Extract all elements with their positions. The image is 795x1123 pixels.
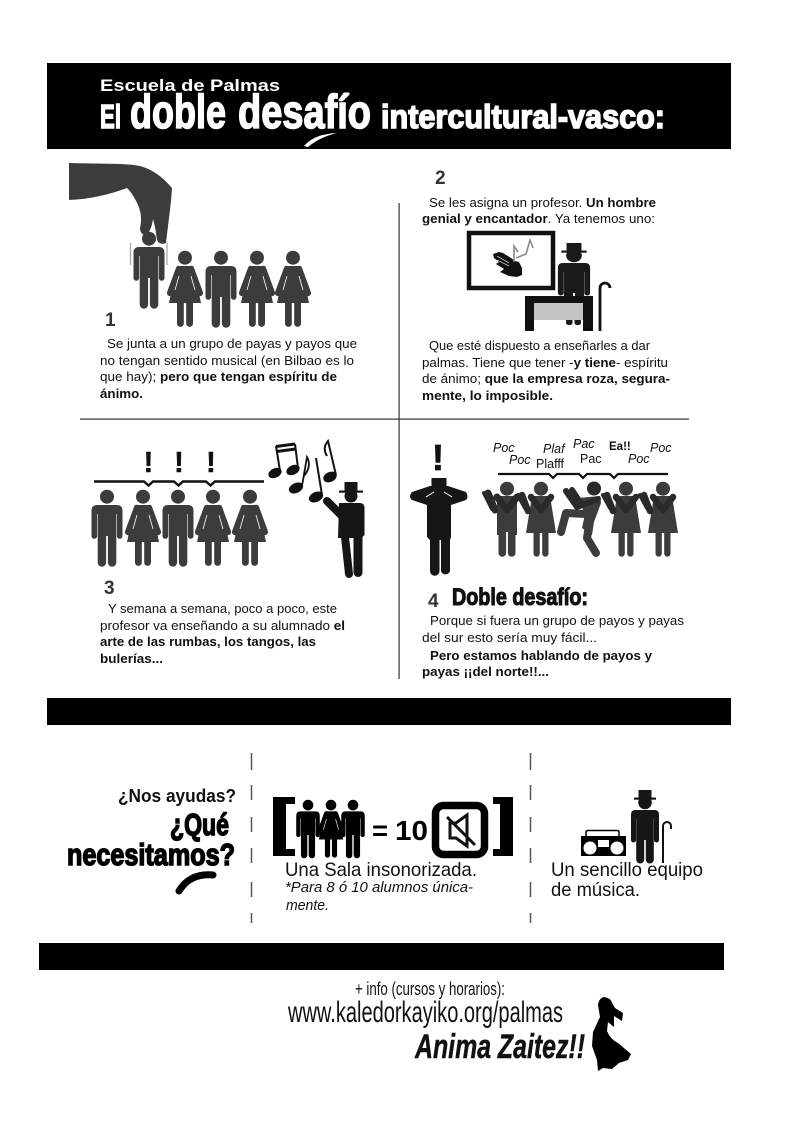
number 1: 1 <box>105 310 116 331</box>
icon: boombox <box>581 830 626 856</box>
room note: mente. <box>286 898 329 914</box>
panel: soundproof room <box>273 797 513 914</box>
panel 4 <box>410 437 685 679</box>
text block 4: del sur esto sería muy fácil... <box>422 630 597 645</box>
text block 2 bottom: Que esté dispuesto a enseñarles a dar <box>429 338 651 353</box>
icon: musical notes <box>514 240 533 262</box>
text block 2 bottom <box>422 338 670 403</box>
equals ten <box>372 815 428 846</box>
teacher covering ears <box>410 478 468 576</box>
swoosh <box>179 875 213 891</box>
help heading: ¿Qué <box>170 807 229 842</box>
black band middle <box>47 698 731 725</box>
text block 1: no tengan sentido musical (en Bilbao es lo <box>100 353 354 368</box>
slogan: Anima Zaitez!! <box>414 1028 585 1066</box>
cane <box>663 822 671 863</box>
shoes <box>566 320 581 325</box>
help subheading: ¿Nos ayudas? <box>118 786 236 806</box>
text block 2 bottom: palmas. Tiene que tener - y tiene- espíritu <box>422 355 668 370</box>
room note <box>285 880 473 914</box>
more info line: + info (cursos y horarios): <box>355 979 505 999</box>
icon: hand picking a person <box>69 163 172 244</box>
teacher conducting <box>327 482 364 577</box>
bracket line <box>498 474 668 478</box>
figures: clapping students <box>484 482 678 557</box>
clapping sounds: Poc <box>509 453 531 467</box>
website: www.kaledorkayiko.org/palmas <box>287 996 563 1029</box>
number 3: 3 <box>104 578 115 599</box>
figures: students <box>296 800 365 858</box>
header: title: El <box>100 98 121 135</box>
clapping sounds: Pac <box>580 452 602 466</box>
text block 2 top: Se les asigna un profesor. Un hombre <box>429 195 656 210</box>
panel: music equipment <box>551 790 703 901</box>
black band lower <box>39 943 724 970</box>
equipment caption: de música. <box>551 880 640 901</box>
screen with clapping hands <box>469 233 553 288</box>
header: title: doble <box>130 85 226 138</box>
text block 3: arte de las rumbas, los tangos, las <box>100 634 316 649</box>
header: title: intercultural-vasco: <box>381 98 665 135</box>
exclamation marks: ! <box>144 447 153 479</box>
figure: teacher <box>631 790 659 864</box>
teacher behind desk <box>525 243 610 332</box>
number 4: 4 <box>428 591 439 612</box>
text block 4: payas ¡¡del norte!!... <box>422 664 549 679</box>
equals ten: 10 <box>395 815 428 846</box>
header: title: desafío <box>238 85 371 138</box>
text block 2 top <box>422 195 656 226</box>
dashed column dividers <box>252 753 530 923</box>
equipment caption <box>551 860 703 901</box>
icon: lift marks <box>130 243 167 265</box>
exclamation marks <box>144 447 216 479</box>
exclamation mark: ! <box>432 437 444 478</box>
text block 3: Y semana a semana, poco a poco, este <box>108 601 337 616</box>
panel 2 <box>422 168 670 403</box>
text block 1: ánimo. <box>100 386 143 401</box>
bracket line <box>94 482 264 486</box>
left bracket <box>273 797 295 856</box>
clapping sounds: Pac <box>573 437 595 451</box>
text block 2 bottom: mente, lo imposible. <box>422 388 553 403</box>
clapping sounds: Poc <box>493 441 515 455</box>
header: swoosh <box>304 133 337 147</box>
header: title <box>100 85 665 138</box>
help heading: necesitamos? <box>67 837 235 872</box>
panel 3 <box>92 441 364 666</box>
text block 2 top: genial y encantador . Ya tenemos uno: <box>422 211 655 226</box>
text block 3: bulerías... <box>100 651 163 666</box>
right bracket <box>493 797 513 856</box>
panel dividers <box>80 203 689 679</box>
text block 1: Se junta a un grupo de payas y payos que <box>107 336 357 351</box>
equals ten: = <box>372 815 388 846</box>
number 2: 2 <box>435 168 446 189</box>
clapping sounds: Plaf <box>543 442 566 456</box>
icon: clapping hands <box>493 252 522 277</box>
clapping sounds: Poc <box>628 452 650 466</box>
clapping sounds <box>493 437 672 471</box>
footer <box>287 979 631 1071</box>
text block 4: Pero estamos hablando de payos y <box>430 648 653 663</box>
header: school name: Escuela de Palmas <box>100 77 280 95</box>
exclamation marks: ! <box>174 447 184 479</box>
text block 4: Porque si fuera un grupo de payos y payas <box>430 613 685 628</box>
help heading <box>67 807 235 872</box>
text block 3 <box>100 601 345 666</box>
equipment caption: Un sencillo equipo <box>551 860 703 881</box>
clapping sounds: Poc <box>650 441 672 455</box>
room note: *Para 8 ó 10 alumnos única- <box>285 880 473 896</box>
panel 1 <box>69 163 357 401</box>
cane <box>600 283 610 331</box>
figures: group of students <box>134 232 309 328</box>
musical notes <box>267 441 338 504</box>
header band <box>47 63 731 149</box>
figures: students <box>92 490 266 567</box>
exclamation marks: ! <box>206 447 216 479</box>
icon: flamenco dancer <box>592 997 631 1071</box>
clapping sounds: Ea!! <box>609 441 631 453</box>
room caption: Una Sala insonorizada. <box>285 859 477 881</box>
text block 1: que hay); pero que tengan espíritu de <box>100 369 337 384</box>
subheading: Doble desafío: <box>452 584 588 611</box>
panel: help question <box>67 786 236 891</box>
text block 1 <box>100 336 357 401</box>
desk <box>525 296 593 331</box>
figure: dancing student <box>561 482 601 553</box>
text block 4 <box>422 613 685 679</box>
icon: muted speaker <box>436 806 484 854</box>
clapping sounds: Plafff <box>536 457 565 471</box>
text block 3: profesor va enseñando a su alumnado el <box>100 618 345 633</box>
text block 2 bottom: de ánimo; que la empresa roza, segura- <box>422 371 670 386</box>
